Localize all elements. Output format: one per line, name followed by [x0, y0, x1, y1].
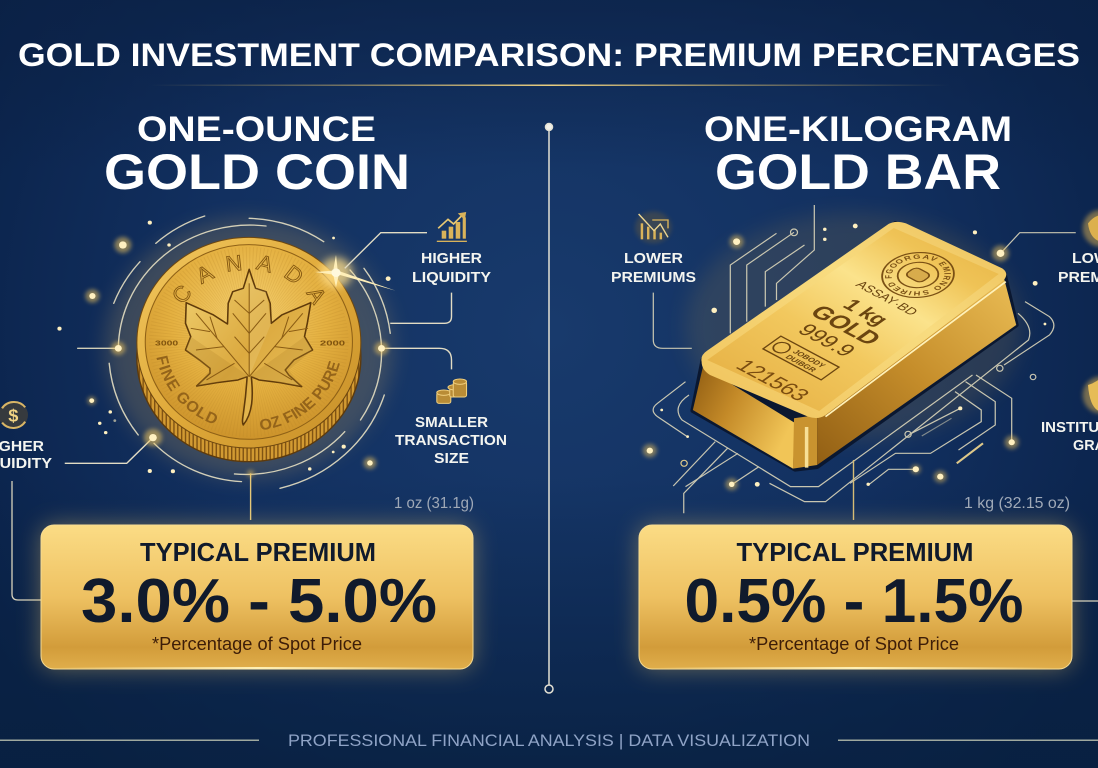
- coin face: [137, 237, 361, 448]
- panel: typical premium coin: 3.0% - 5.0%: [81, 567, 437, 636]
- connector: right edge of bar panel: [1072, 600, 1098, 602]
- bar seal: ORGAV EMIRNO SHIRED FGONG: [885, 254, 951, 296]
- benefit label: lower premiums (left): [611, 250, 696, 286]
- icon: institutional shield: [1083, 377, 1098, 413]
- benefit label: lower premiums (left): PREMIUMS: [611, 269, 696, 286]
- heading: one-ounce gold coin: GOLD COIN: [104, 144, 410, 200]
- heading: one-ounce gold coin: [104, 110, 410, 200]
- benefit label: higher liquidity (right): LIQUIDITY: [412, 269, 491, 286]
- heading: one-kilogram gold bar: GOLD BAR: [715, 144, 1001, 200]
- benefit label: lower premiums (left): LOWER: [624, 250, 683, 267]
- title: GOLD INVESTMENT COMPARISON: PREMIUM PERCENTAGES: [18, 37, 1080, 73]
- coin lettering: 3000: [155, 339, 178, 348]
- benefit label: lower premiums (right, cropped): [1058, 250, 1098, 286]
- panel: typical premium coin: [41, 525, 473, 670]
- bar top lip: [701, 222, 1006, 418]
- benefit label: higher liquidity (right): [412, 250, 491, 286]
- panel: typical premium bar: 0.5% - 1.5%: [684, 567, 1024, 636]
- footer: PROFESSIONAL FINANCIAL ANALYSIS | DATA VISUALIZATION: [288, 731, 810, 750]
- benefit label: smaller transaction size: SMALLER: [415, 414, 488, 431]
- benefit label: institutional grade (cropped): [1041, 419, 1098, 454]
- heading: one-kilogram gold bar: ONE-KILOGRAM: [704, 110, 1012, 149]
- coin illustration: [0, 210, 468, 520]
- panel: typical premium coin: TYPICAL PREMIUM: [140, 537, 376, 567]
- bar engravings: 999.9: [792, 320, 861, 360]
- orbit rings: [78, 216, 390, 488]
- bar front side: [693, 367, 795, 469]
- bar stamp box: DUIBGR: [783, 353, 818, 374]
- coin lettering: [155, 254, 345, 430]
- coin lettering: 2000: [320, 339, 345, 348]
- glowing dots: [57, 221, 391, 477]
- weight label: 1 kg: 1 kg (32.15 oz): [964, 495, 1070, 512]
- bar engravings: [730, 252, 955, 405]
- bar top face: [707, 228, 999, 411]
- icon: dollar cycle: $: [8, 406, 18, 425]
- gold bar illustration: [635, 205, 1098, 520]
- benefit label: smaller transaction size: [395, 414, 507, 467]
- benefit label: higher liquidity (left, cropped): [0, 438, 52, 472]
- coin lettering: CANADA: [174, 254, 324, 306]
- icon: dollar cycle: [0, 401, 28, 429]
- panel: typical premium bar: [639, 525, 1072, 670]
- heading: one-kilogram gold bar: [704, 110, 1012, 200]
- connector: left liquidity to coin panel: [12, 481, 41, 600]
- bar engravings: 121563: [730, 356, 815, 405]
- bar stamp box: [763, 336, 839, 380]
- bar shadow: [693, 223, 1016, 469]
- bar engravings: GOLD: [804, 301, 887, 350]
- center divider: [545, 124, 553, 693]
- panel: typical premium bar: *Percentage of Spot Price: [749, 634, 959, 654]
- connector lines: [65, 233, 452, 520]
- icon: falling premiums: [635, 211, 672, 243]
- panel: typical premium coin: *Percentage of Spot Price: [152, 634, 362, 654]
- heading: one-ounce gold coin: ONE-OUNCE: [137, 110, 376, 149]
- bar stamp box: JOBODY: [791, 348, 828, 370]
- benefit label: smaller transaction size: SIZE: [434, 450, 469, 467]
- bar engravings: ASSAY·BD: [852, 278, 922, 318]
- circuit lines: [653, 205, 1076, 520]
- glowing dots: [643, 224, 1046, 490]
- icon: coin stacks: [437, 379, 467, 403]
- benefit label: smaller transaction size: TRANSACTION: [395, 432, 507, 449]
- weight label: 1 oz: 1 oz (31.1g): [394, 495, 474, 512]
- maple leaf: [186, 269, 313, 425]
- icon: premium shield top right: [1083, 210, 1098, 247]
- icon: rising bar chart: [437, 212, 467, 242]
- bar engravings: 1 kg: [838, 296, 893, 329]
- benefit label: higher liquidity (right): HIGHER: [421, 250, 482, 267]
- coin lettering: FINE GOLD: [156, 356, 217, 424]
- bar right side: [817, 278, 1016, 465]
- coin lettering: OZ FINE PURE: [260, 360, 340, 430]
- coin edge: [137, 254, 361, 462]
- sparkle: [315, 255, 396, 291]
- panel: typical premium bar: TYPICAL PREMIUM: [736, 537, 974, 567]
